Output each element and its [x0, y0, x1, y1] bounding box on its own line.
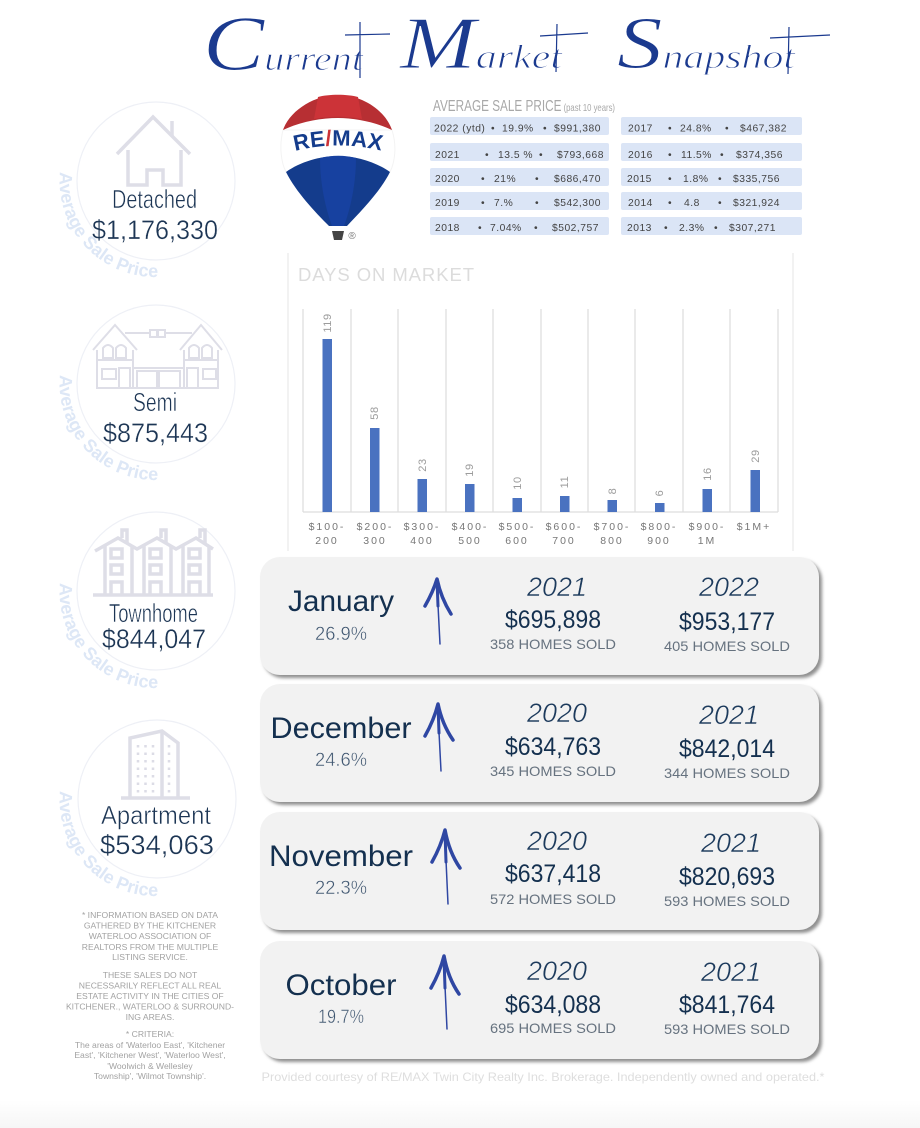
category labels: 200: [315, 535, 339, 547]
column: 2021: $841,764: [679, 991, 775, 1019]
table rows: 2017: [628, 124, 653, 134]
icon: apartment tower: [121, 731, 190, 798]
column: 2020: 572 HOMES SOLD: [490, 891, 616, 907]
month heading: November: [269, 840, 413, 873]
category labels: [309, 521, 771, 547]
icon: semi-detached house: [93, 325, 222, 388]
column: 2022: 2022: [698, 572, 759, 602]
category labels: $400-: [452, 521, 488, 533]
text block: data disclaimer: * INFORMATION BASED ON DATA: [82, 910, 218, 920]
column: 2020: [490, 698, 616, 779]
table rows: 2015: [627, 174, 652, 185]
text block: data disclaimer: Township', 'Wilmot Township'.: [94, 1071, 206, 1081]
icon: house: [117, 117, 190, 185]
text block: data disclaimer: GATHERED BY THE KITCHENER: [84, 920, 216, 930]
value labels: 10: [512, 476, 524, 490]
table rows: $686,470: [554, 174, 601, 185]
column: 2021: 344 HOMES SOLD: [664, 765, 790, 781]
text block: data disclaimer: ING AREAS.: [126, 1012, 174, 1022]
column: 2021: 2021: [526, 572, 587, 602]
table rows: 7.04%: [490, 223, 522, 234]
column: 2022: $953,177: [679, 608, 775, 636]
table rows: 4.8: [684, 198, 700, 209]
table rows: •: [485, 150, 489, 161]
table rows: 2016: [628, 150, 653, 161]
percent change: 24.6%: [315, 750, 367, 771]
month heading: January: [288, 585, 394, 618]
value labels: 8: [607, 488, 619, 494]
text block: data disclaimer: REALTORS FROM THE MULTIPLE: [82, 942, 218, 952]
bars: [322, 339, 760, 512]
heading: average sale price: AVERAGE SALE PRICE (past 10 years): [433, 98, 615, 115]
logo: RE/MAX balloon: RE/MAX: [293, 130, 384, 151]
table rows: •: [535, 198, 539, 209]
column: 2022: 405 HOMES SOLD: [664, 638, 790, 654]
category labels: 600: [505, 535, 529, 547]
table rows: 2020: [435, 174, 460, 185]
text block: data disclaimer: 'Woolwich & Wellesley: [107, 1061, 193, 1071]
chart heading: DAYS ON MARKET: [298, 264, 475, 285]
column: 2020: $634,763: [505, 733, 601, 761]
price: townhome: $844,047: [102, 624, 206, 654]
column: 2021: $820,693: [679, 863, 775, 891]
value labels: 11: [559, 476, 571, 488]
table rows: [430, 117, 802, 235]
category labels: 400: [410, 535, 434, 547]
chart: days on market: [288, 253, 793, 551]
category labels: 900: [647, 535, 671, 547]
text block: data disclaimer: NECESSARILY REFLECT ALL REAL: [79, 980, 221, 990]
label: semi: Semi: [133, 387, 177, 417]
category labels: $1M+: [737, 521, 771, 533]
table rows: $542,300: [554, 198, 601, 209]
panel: townhome price: [60, 512, 236, 688]
table rows: •: [668, 174, 672, 185]
table rows: $374,356: [736, 150, 783, 161]
percent change: 22.3%: [315, 878, 367, 899]
panel: detached price: [60, 102, 236, 278]
percent change: 26.9%: [315, 624, 367, 645]
table rows: $991,380: [554, 124, 601, 134]
column: 2020: 2020: [526, 698, 587, 728]
title: M arket: [399, 3, 564, 85]
panel: October: [260, 941, 819, 1059]
column: 2021: [490, 572, 616, 652]
value labels: 19: [464, 463, 476, 477]
category labels: $900-: [689, 521, 725, 533]
label: detached: Detached: [112, 184, 197, 214]
table rows: $467,382: [740, 124, 787, 134]
text block: data disclaimer: LISTING SERVICE.: [112, 952, 188, 962]
table rows: 19.9%: [502, 124, 534, 134]
table rows: •: [664, 223, 668, 234]
table rows: 2018: [435, 223, 460, 234]
label: townhome: Townhome: [109, 598, 198, 628]
category labels: 1M: [698, 535, 716, 547]
table rows: $502,757: [552, 223, 599, 234]
column: 2021: $695,898: [505, 606, 601, 634]
column: 2021: 358 HOMES SOLD: [490, 636, 616, 652]
price: detached: $1,176,330: [92, 215, 218, 245]
icon: townhomes: [93, 530, 213, 595]
table rows: $335,756: [733, 174, 780, 185]
category labels: $100-: [309, 521, 345, 533]
column: 2020: [490, 826, 616, 907]
title: [203, 0, 830, 87]
table rows: •: [481, 198, 485, 209]
table rows: •: [668, 198, 672, 209]
value labels: 6: [654, 490, 666, 496]
text block: data disclaimer: East', 'Kitchener West', 'Waterloo West',: [74, 1050, 226, 1060]
icon: up arrow: [425, 579, 451, 644]
column: 2021: 593 HOMES SOLD: [664, 1021, 790, 1037]
table rows: •: [720, 150, 724, 161]
column: 2020: 2020: [526, 956, 587, 986]
table rows: •: [714, 223, 718, 234]
table rows: $307,271: [729, 223, 776, 234]
table rows: 11.5%: [681, 150, 712, 161]
column: 2021: [664, 700, 790, 781]
table rows: 2021: [435, 150, 460, 161]
category labels: 800: [600, 535, 624, 547]
column: 2020: $637,418: [505, 860, 601, 888]
table rows: •: [539, 150, 543, 161]
percent change: 19.7%: [318, 1007, 364, 1028]
table rows: •: [718, 198, 722, 209]
table rows: •: [478, 223, 482, 234]
table rows: 2013: [627, 223, 652, 234]
price: apartment: $534,063: [100, 830, 214, 860]
value labels: 23: [417, 458, 429, 472]
column: 2021: [664, 828, 790, 909]
table rows: 2014: [628, 198, 653, 209]
panel: apartment price: [60, 720, 236, 896]
curved caption: Average Sale Price: [60, 584, 158, 688]
logo: RE/MAX balloon: [280, 94, 396, 242]
column: 2021: 2021: [700, 828, 761, 858]
label: apartment: Apartment: [101, 800, 212, 830]
curved caption: Average Sale Price: [60, 172, 158, 278]
table rows: 2.3%: [679, 223, 704, 234]
column: 2021: 2021: [698, 700, 759, 730]
icon: up arrow: [432, 830, 460, 904]
category labels: 700: [552, 535, 576, 547]
curved caption: Average Sale Price: [60, 376, 158, 480]
category labels: $500-: [499, 521, 535, 533]
value labels: 58: [369, 406, 381, 420]
month heading: December: [270, 712, 412, 745]
table rows: •: [481, 174, 485, 185]
icon: up arrow: [431, 956, 459, 1029]
table rows: 2019: [435, 198, 460, 209]
table rows: •: [535, 174, 539, 185]
table rows: •: [668, 124, 672, 134]
panel: average sale price table: [430, 98, 802, 235]
logo: RE/MAX balloon: ®: [348, 231, 356, 242]
text block: data disclaimer: * CRITERIA:: [126, 1029, 174, 1039]
value labels: 16: [702, 467, 714, 481]
column: 2020: [490, 956, 616, 1036]
title: S napshot: [617, 3, 797, 85]
table rows: 21%: [494, 174, 516, 185]
table rows: •: [725, 124, 729, 134]
column: 2020: 345 HOMES SOLD: [490, 763, 616, 779]
column: 2021: 2021: [700, 957, 761, 987]
column: 2020: 695 HOMES SOLD: [490, 1020, 616, 1036]
category labels: $300-: [404, 521, 440, 533]
table rows: 7.%: [494, 198, 513, 209]
column: 2021: 593 HOMES SOLD: [664, 893, 790, 909]
panel: January: [260, 557, 819, 675]
value labels: 119: [322, 313, 334, 333]
table rows: •: [718, 174, 722, 185]
category labels: $700-: [594, 521, 630, 533]
column: 2020: $634,088: [505, 991, 601, 1019]
table rows: •: [543, 124, 547, 134]
table rows: 13.5 %: [498, 150, 533, 161]
table rows: 2022 (ytd): [434, 124, 485, 134]
category labels: $200-: [357, 521, 393, 533]
panel: December: [260, 684, 819, 802]
category labels: 300: [363, 535, 387, 547]
value labels: [322, 313, 762, 496]
text block: data disclaimer: THESE SALES DO NOT: [103, 970, 198, 980]
text block: data disclaimer: WATERLOO ASSOCIATION OF: [89, 931, 211, 941]
category labels: $600-: [546, 521, 582, 533]
column: 2022: [664, 572, 790, 654]
text block: data disclaimer: [66, 910, 234, 1081]
table rows: •: [491, 124, 495, 134]
month heading: October: [286, 969, 397, 1002]
price: semi: $875,443: [103, 418, 208, 448]
table rows: 24.8%: [680, 124, 712, 134]
title: C urrent: [203, 0, 365, 87]
text block: data disclaimer: The areas of 'Waterloo East', 'Kitchener: [75, 1040, 225, 1050]
panel: semi price: [60, 304, 236, 480]
table rows: •: [534, 223, 538, 234]
text block: data disclaimer: ESTATE ACTIVITY IN THE CITIES OF: [76, 991, 224, 1001]
table rows: •: [668, 150, 672, 161]
panel: November: [260, 812, 819, 930]
column: 2021: $842,014: [679, 735, 775, 763]
table rows: $321,924: [733, 198, 780, 209]
category labels: 500: [458, 535, 482, 547]
text block: data disclaimer: KITCHENER., WATERLOO & SURROUND-: [66, 1002, 234, 1012]
value labels: 29: [750, 449, 762, 463]
column: 2021: [664, 957, 790, 1037]
footer credit: Provided courtesy of RE/MAX Twin City Realty Inc. Brokerage. Independently owned and operated.*: [262, 1070, 825, 1084]
table rows: 1.8%: [683, 174, 708, 185]
curved caption: Average Sale Price: [60, 792, 158, 896]
category labels: $800-: [641, 521, 677, 533]
column: 2020: 2020: [526, 826, 587, 856]
table rows: $793,668: [557, 150, 604, 161]
icon: up arrow: [425, 704, 453, 771]
